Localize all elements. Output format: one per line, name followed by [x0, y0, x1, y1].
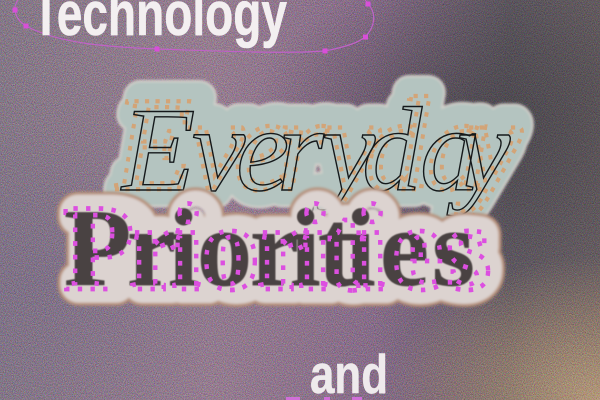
halo behind Priorities: Priorities — [76, 187, 487, 309]
halo behind Everyday: Everyday — [126, 69, 517, 202]
ellipse path with anchor points around Technology — [12, 0, 374, 54]
halo behind Priorities: Priorities — [76, 187, 487, 309]
halo behind Everyday: Everyday — [126, 69, 517, 202]
halo behind Everyday: Everyday — [120, 83, 511, 216]
heading word: Everyday — [112, 69, 522, 219]
dark lettering: Priorities — [64, 187, 475, 309]
dotted tan ghost outline: Everyday — [112, 71, 522, 219]
heading word: Priorities — [64, 179, 491, 316]
cropped magenta marks at bottom edge — [286, 397, 362, 400]
magenta dotted ghost outline: Priorities — [64, 179, 491, 316]
halo behind Everyday: Everyday — [120, 83, 511, 216]
black outline lettering: Everyday — [120, 83, 511, 216]
